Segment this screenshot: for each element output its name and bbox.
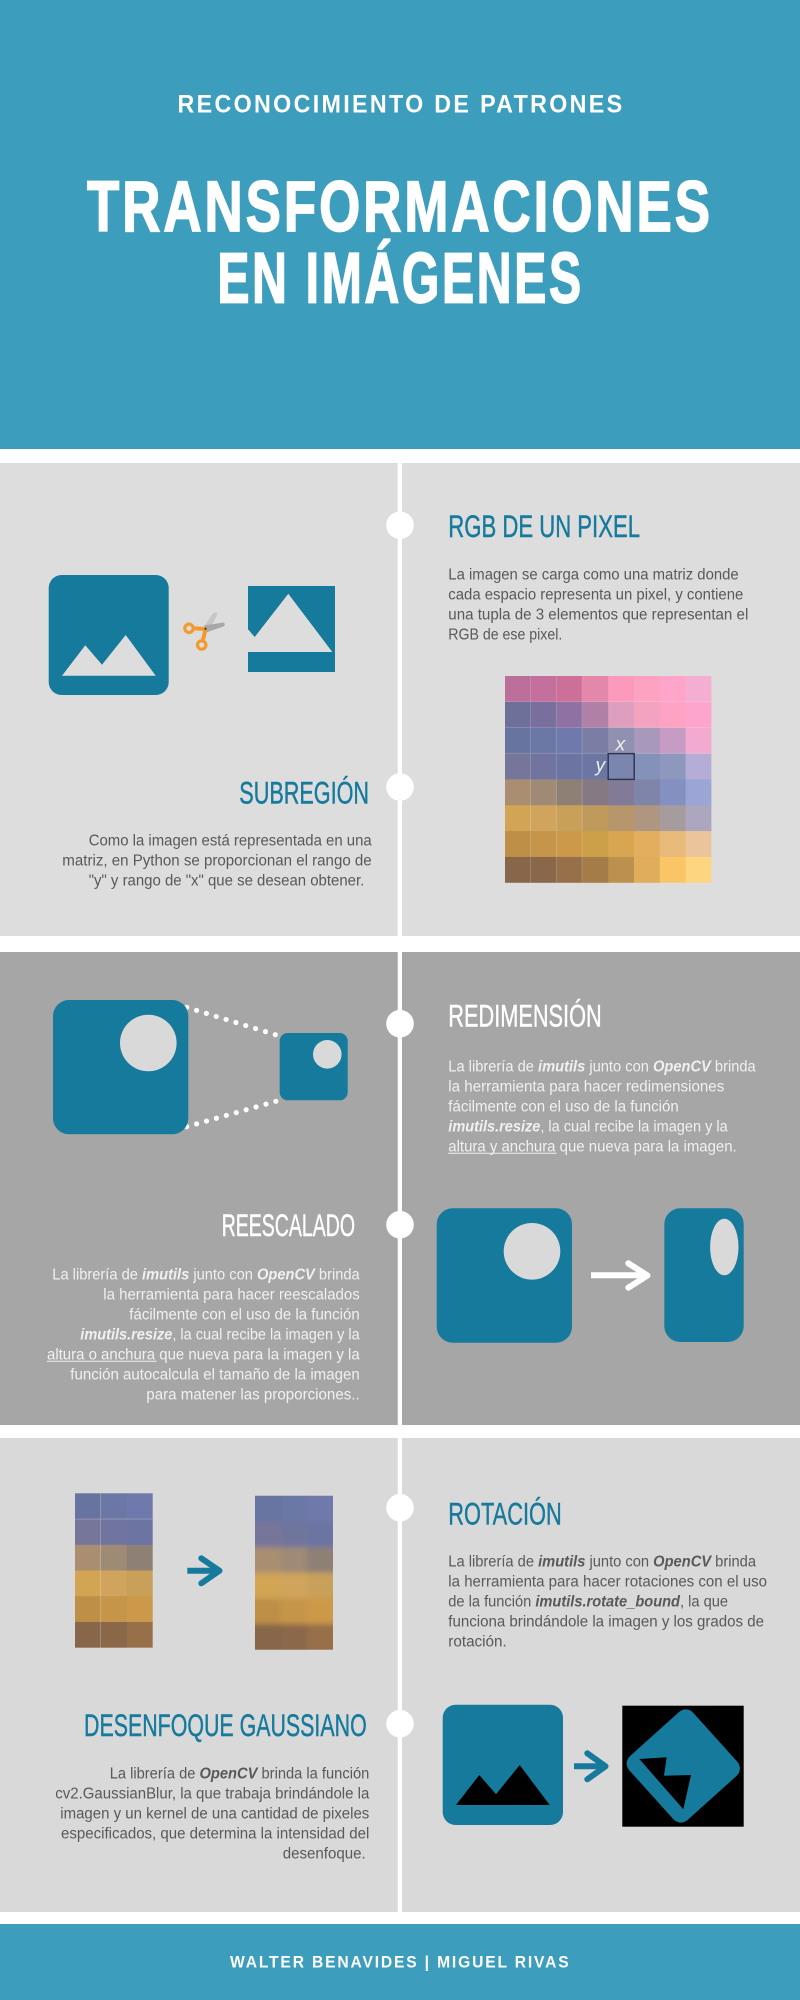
text: rotación [448,1553,767,1650]
text: desenfoque: La librería de OpenCV brinda la función [110,1765,369,1782]
heading: reescalado: REESCALADO [222,1207,355,1243]
panel: rgb de un pixel [402,463,800,936]
text: desenfoque: especificados, que determina la intensidad del [61,1825,369,1842]
text: reescalado: imutils.resize, la cual recibe la imagen y la [80,1326,360,1343]
text: subregión: Como la imagen está representada en una [89,832,372,849]
heading: rgb de un pixel: RGB DE UN PIXEL [448,508,640,544]
text: subregión: "y" y rango de "x" que se desean obtener. [89,872,364,889]
icon: scissors [185,612,225,649]
heading: desenfoque gaussiano: DESENFOQUE GAUSSIANO [84,1707,367,1743]
panel: subregión [0,463,398,936]
chart: blurred pixel tile [255,1496,333,1650]
panel: redimensión [402,952,800,1425]
panel: rotación [402,1438,800,1912]
text: redimensión: altura y anchura que nueva para la imagen. [448,1138,737,1155]
text: reescalado: La librería de imutils junto con OpenCV brinda [52,1266,360,1283]
heading: redimensión: REDIMENSIÓN [448,998,602,1034]
icon: cropped image [248,586,335,672]
text: redimensión: imutils.resize, la cual recibe la imagen y la [448,1118,728,1135]
icon: resized image [664,1208,744,1342]
icon: small image [280,1033,348,1100]
panel: desenfoque gaussiano [0,1438,398,1912]
text: reescalado: altura o anchura que nueva para la imagen y la [47,1346,360,1363]
arrow: teal rotation [574,1753,606,1779]
main title: EN IMÁGENES [217,240,584,319]
footer band [0,1924,800,2000]
text: rotación: La librería de imutils junto con OpenCV brinda [448,1553,756,1570]
icon: original image [437,1208,572,1343]
footer text: WALTER BENAVIDES | MIGUEL RIVAS [230,1952,570,1971]
chart: original pixel tile [75,1493,153,1648]
icon: image before rotation [443,1705,563,1825]
text: reescalado: fácilmente con el uso de la función [129,1306,360,1323]
text: rgb: una tupla de 3 elementos que representan el [448,606,748,624]
text: reescalado: función autocalcula el tamaño de la imagen [70,1366,360,1383]
text: desenfoque: desenfoque. [283,1845,366,1862]
text: desenfoque: imagen y un kernel de una cantidad de pixeles [60,1805,370,1822]
heading: rotación: ROTACIÓN [448,1495,562,1531]
text: desenfoque: cv2.GaussianBlur, la que trabaja brindándole la [55,1785,370,1802]
text: rgb: cada espacio representa un pixel, y contiene [448,586,743,604]
text: rgb: RGB de ese pixel. [448,626,562,644]
text: rgb: La imagen se carga como una matriz donde [448,566,739,584]
text: redimensión [448,1058,756,1155]
arrow: teal [187,1558,220,1583]
text: rotación: la herramienta para hacer rotaciones con el uso [448,1573,767,1590]
text: redimensión: La librería de imutils junto con OpenCV brinda [448,1058,756,1075]
text: reescalado: la herramienta para hacer reescalados [103,1286,360,1303]
text: rotación: de la función imutils.rotate_bound, la que [448,1593,728,1610]
text: rotación: funciona brindándole la imagen y los grados de [448,1613,764,1630]
subtitle: RECONOCIMIENTO DE PATRONES [178,90,624,118]
text: subregión: matriz, en Python se proporcionan el rango de [62,852,372,869]
text: redimensión: la herramienta para hacer redimensiones [448,1078,725,1095]
chart: pixel grid: x [614,734,626,756]
main title [87,168,713,319]
chart: pixel grid: y [594,755,606,777]
arrow: white [591,1263,648,1288]
text: reescalado: para matener las proporciones.. [146,1386,360,1403]
icon: dotted scale lines [187,1007,277,1127]
text: rgb [448,566,748,644]
text: subregión [62,832,372,889]
panel: reescalado [0,952,398,1425]
icon: full image [49,575,169,695]
header band [0,0,800,449]
timeline dots [386,512,414,1737]
text: desenfoque [55,1765,370,1862]
icon: large image [53,1000,188,1134]
text: reescalado [47,1266,360,1403]
heading: subregión: SUBREGIÓN [239,774,369,810]
text: redimensión: fácilmente con el uso de la función [448,1098,679,1115]
text: rotación: rotación. [448,1633,507,1650]
icon: rotated image [622,1705,744,1827]
chart: pixel grid [505,676,711,883]
